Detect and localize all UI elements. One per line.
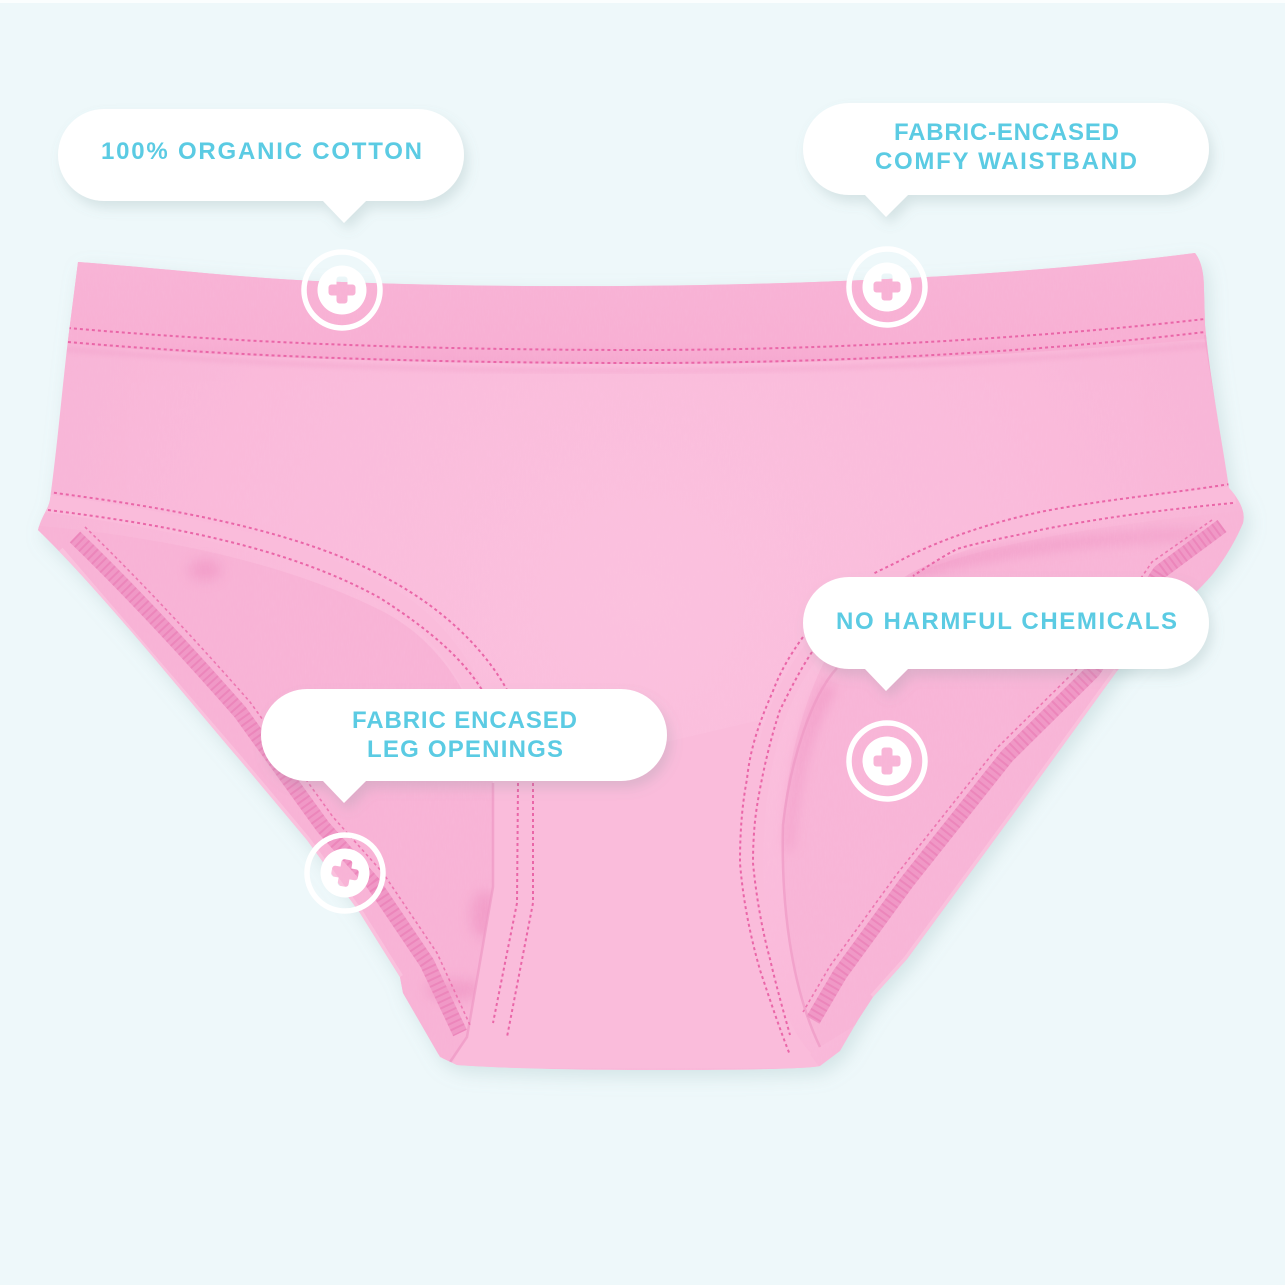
callout: no harmful chemicals <box>803 577 1209 691</box>
callout: no harmful chemicals: NO HARMFUL CHEMICALS <box>836 608 1177 635</box>
leg band stitching <box>85 520 1212 1025</box>
knit texture <box>30 245 1255 1075</box>
icon: plus marker, chemicals <box>849 723 925 799</box>
icon: plus marker, waistband <box>849 249 925 325</box>
right edge of body <box>1204 335 1215 400</box>
callout: fabric encased leg openings: FABRIC ENCASED <box>352 707 577 734</box>
gusset edge lines <box>450 783 493 1062</box>
garment details <box>20 245 1255 1075</box>
callout: fabric-encased comfy waistband <box>803 103 1209 217</box>
callout: fabric encased leg openings <box>261 689 667 803</box>
binding highlight edges <box>60 550 400 977</box>
left leg seam band <box>75 537 460 1033</box>
right leg seam band <box>813 526 1222 1020</box>
callout: fabric-encased comfy waistband: COMFY WAISTBAND <box>875 148 1137 175</box>
callout: 100% organic cotton <box>58 109 464 223</box>
inner fabric shadows <box>189 530 1200 1000</box>
callout: fabric-encased comfy waistband: FABRIC-ENCASED <box>894 119 1119 146</box>
icon: plus marker, leg openings <box>304 832 386 914</box>
left inner panel <box>20 525 493 1065</box>
icon: plus marker, organic cotton <box>304 252 380 328</box>
callout: 100% organic cotton: 100% ORGANIC COTTON <box>101 138 422 165</box>
stitching <box>48 319 1233 1055</box>
garment silhouette <box>38 253 1244 1070</box>
callout: fabric encased leg openings: LEG OPENINGS <box>367 736 563 763</box>
gusset panel <box>453 894 816 1068</box>
waistband <box>60 245 1215 364</box>
waistband fold shadow <box>119 350 1152 372</box>
hem bands <box>46 497 50 512</box>
right inner panel <box>806 511 1244 1025</box>
garment: pink underwear <box>20 245 1255 1075</box>
